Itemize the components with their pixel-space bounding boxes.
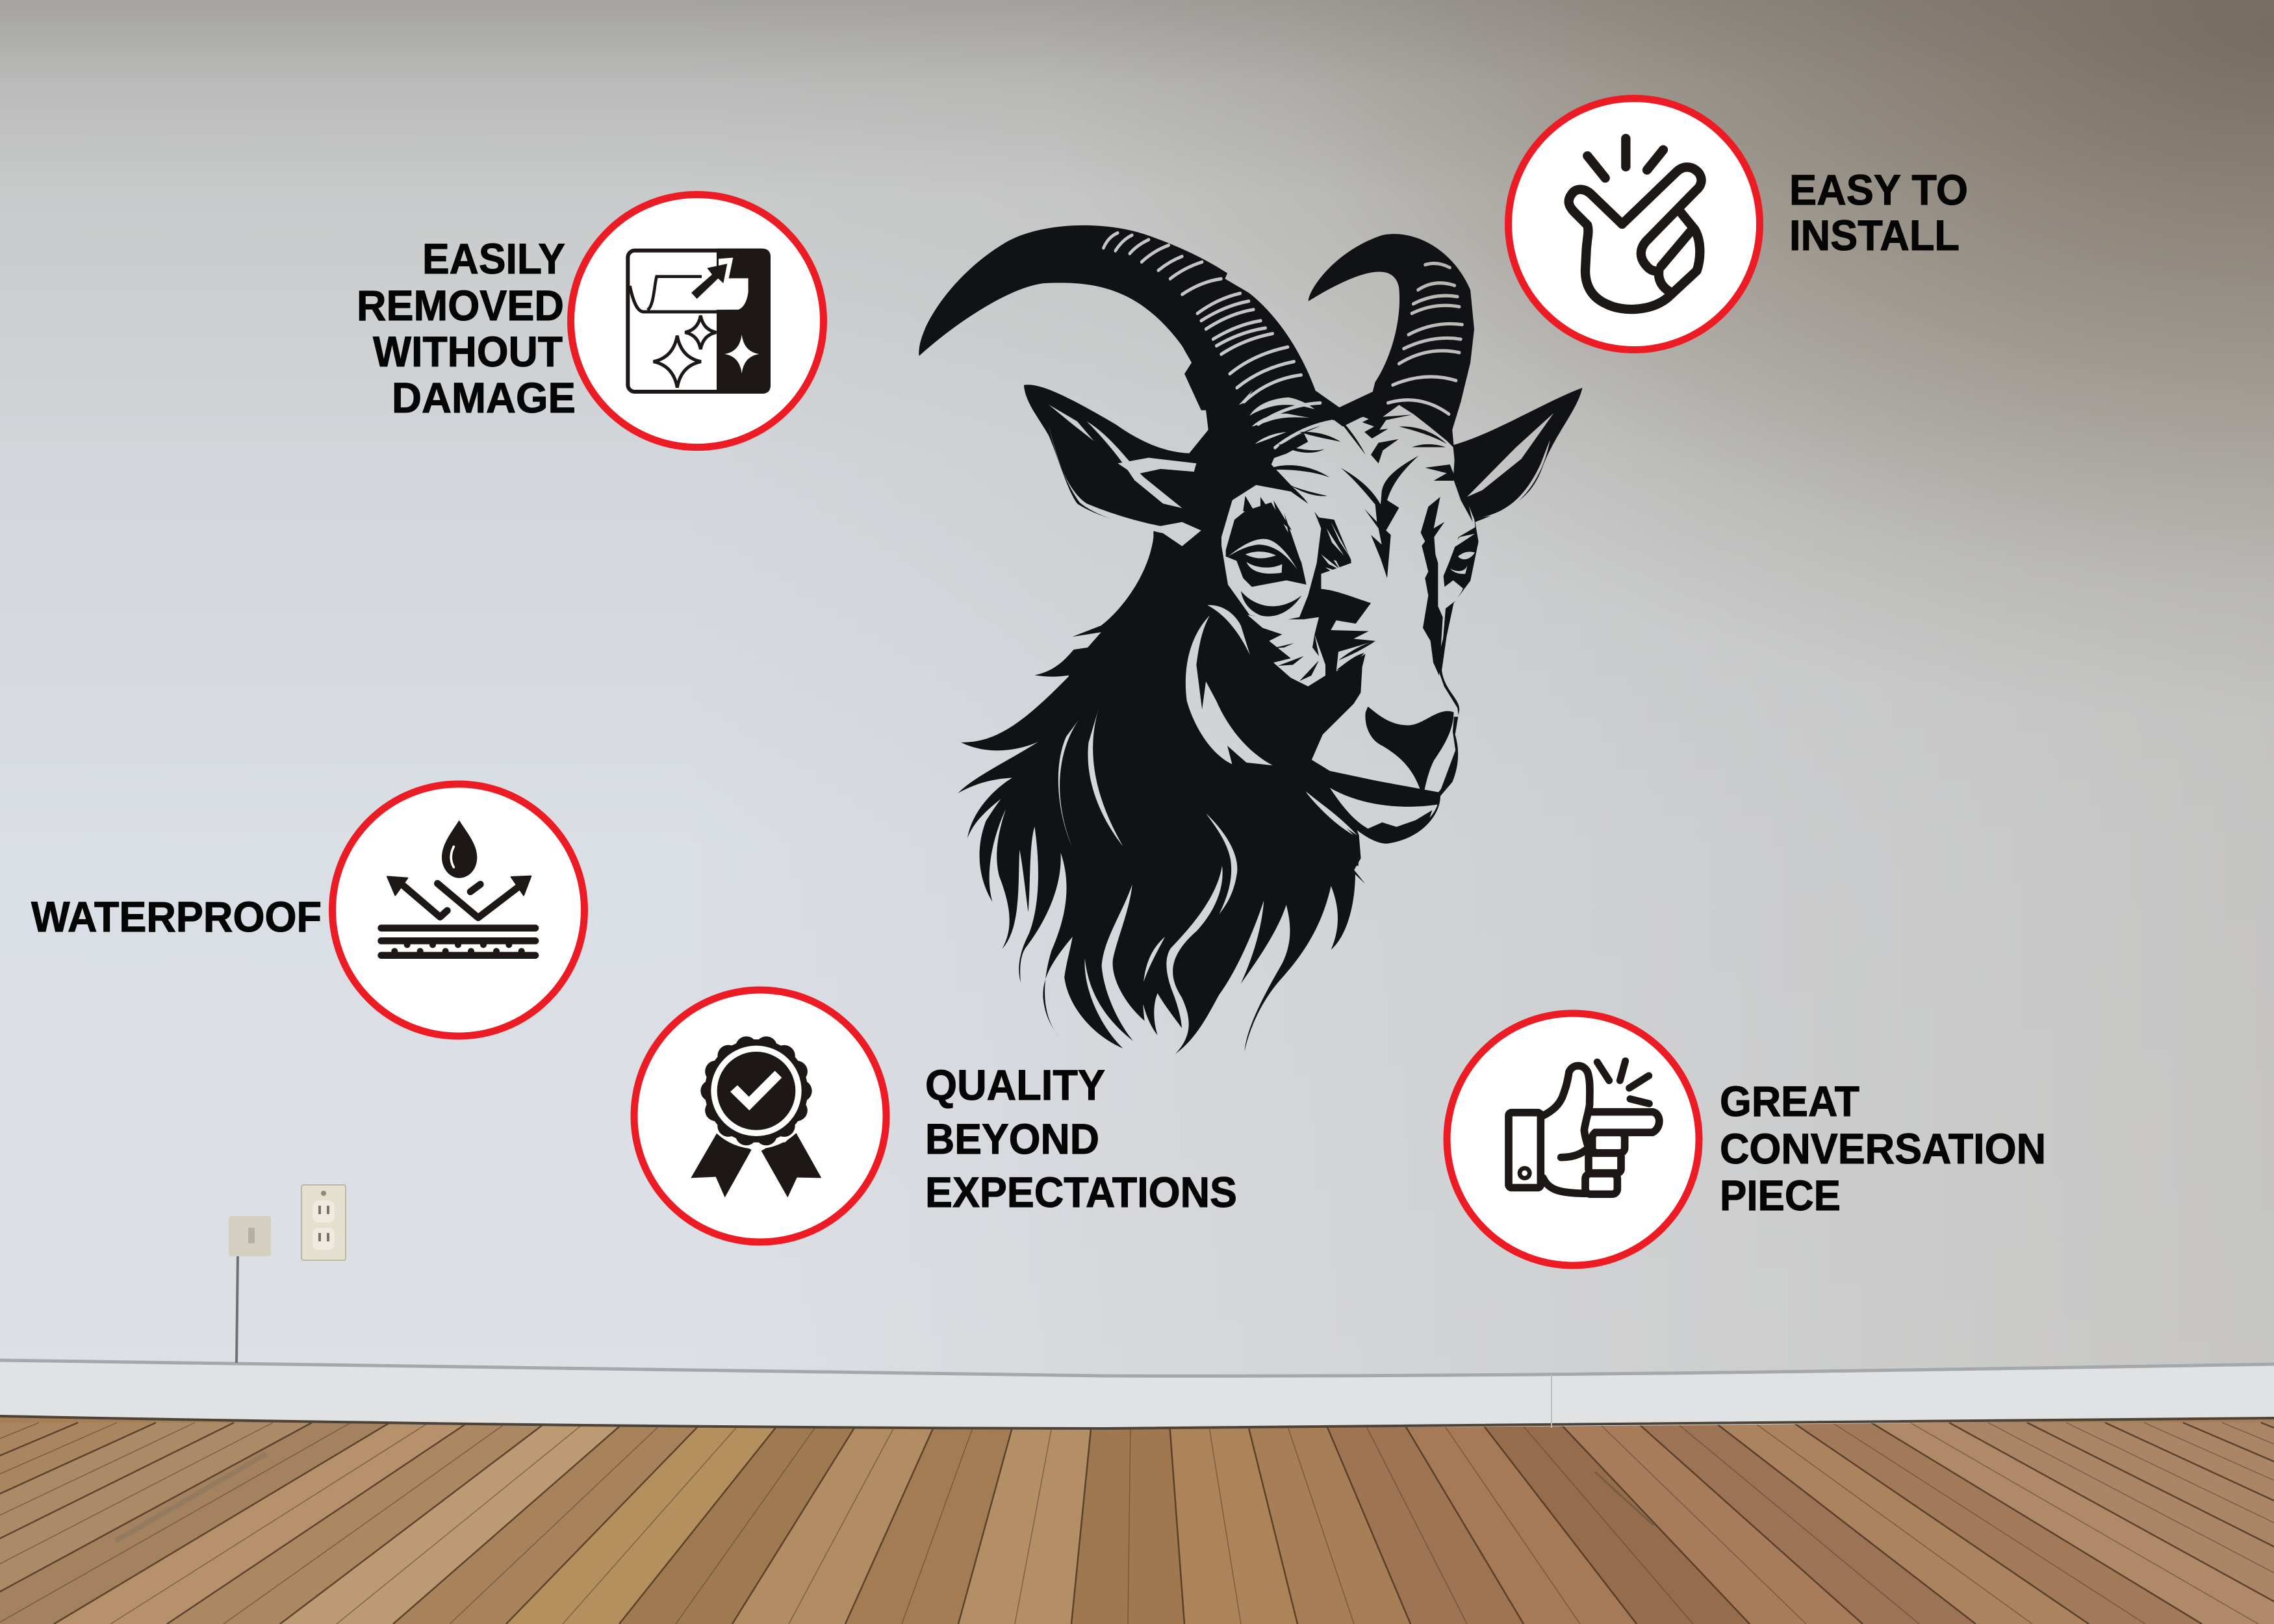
icon: award rosette bbox=[691, 1033, 821, 1197]
feature: conversation piece bbox=[1447, 1013, 2046, 1265]
badge circle bbox=[1509, 99, 1759, 349]
label: quality beyond expectations: EXPECTATIONS bbox=[925, 1168, 1237, 1216]
baseboard bbox=[0, 1360, 2274, 1428]
label: great conversation piece: GREAT bbox=[1720, 1077, 1859, 1125]
label: great conversation piece bbox=[1720, 1077, 2046, 1219]
label: easily removed without damage bbox=[357, 235, 576, 422]
badge circle bbox=[1447, 1013, 1699, 1265]
feature: waterproof bbox=[31, 784, 585, 1036]
label: great conversation piece: PIECE bbox=[1720, 1171, 1841, 1219]
label: easily removed without damage: WITHOUT bbox=[373, 327, 563, 375]
label: easily removed without damage: REMOVED bbox=[357, 281, 564, 329]
icon: peeling sticker with sparkles bbox=[628, 251, 769, 392]
wall outlet bbox=[301, 1185, 346, 1260]
floor bbox=[0, 1410, 2274, 1624]
label: easy to install bbox=[1789, 166, 1968, 259]
goat head decal bbox=[919, 225, 1582, 1054]
feature: easily removed bbox=[357, 195, 824, 447]
feature: quality bbox=[634, 990, 1237, 1242]
label: quality beyond expectations: QUALITY bbox=[925, 1061, 1105, 1109]
badge circle bbox=[634, 990, 886, 1242]
label: easy to install: EASY TO bbox=[1789, 166, 1968, 214]
icon: pointing hand bbox=[1509, 1061, 1659, 1194]
label: easily removed without damage: EASILY bbox=[422, 235, 565, 283]
label: easily removed without damage: DAMAGE bbox=[392, 374, 576, 422]
wall switch box and wire bbox=[229, 1216, 271, 1363]
label: waterproof: WATERPROOF bbox=[31, 893, 322, 941]
badge circle bbox=[333, 784, 585, 1036]
label: quality beyond expectations bbox=[925, 1061, 1237, 1216]
icon: finger snap hand bbox=[1569, 138, 1702, 309]
icon: water drop and layers bbox=[381, 820, 535, 956]
feature: easy to install bbox=[1509, 99, 1968, 349]
label: easy to install: INSTALL bbox=[1789, 211, 1960, 259]
label: quality beyond expectations: BEYOND bbox=[925, 1115, 1099, 1163]
label: great conversation piece: CONVERSATION bbox=[1720, 1124, 2046, 1173]
badge circle bbox=[570, 195, 824, 447]
